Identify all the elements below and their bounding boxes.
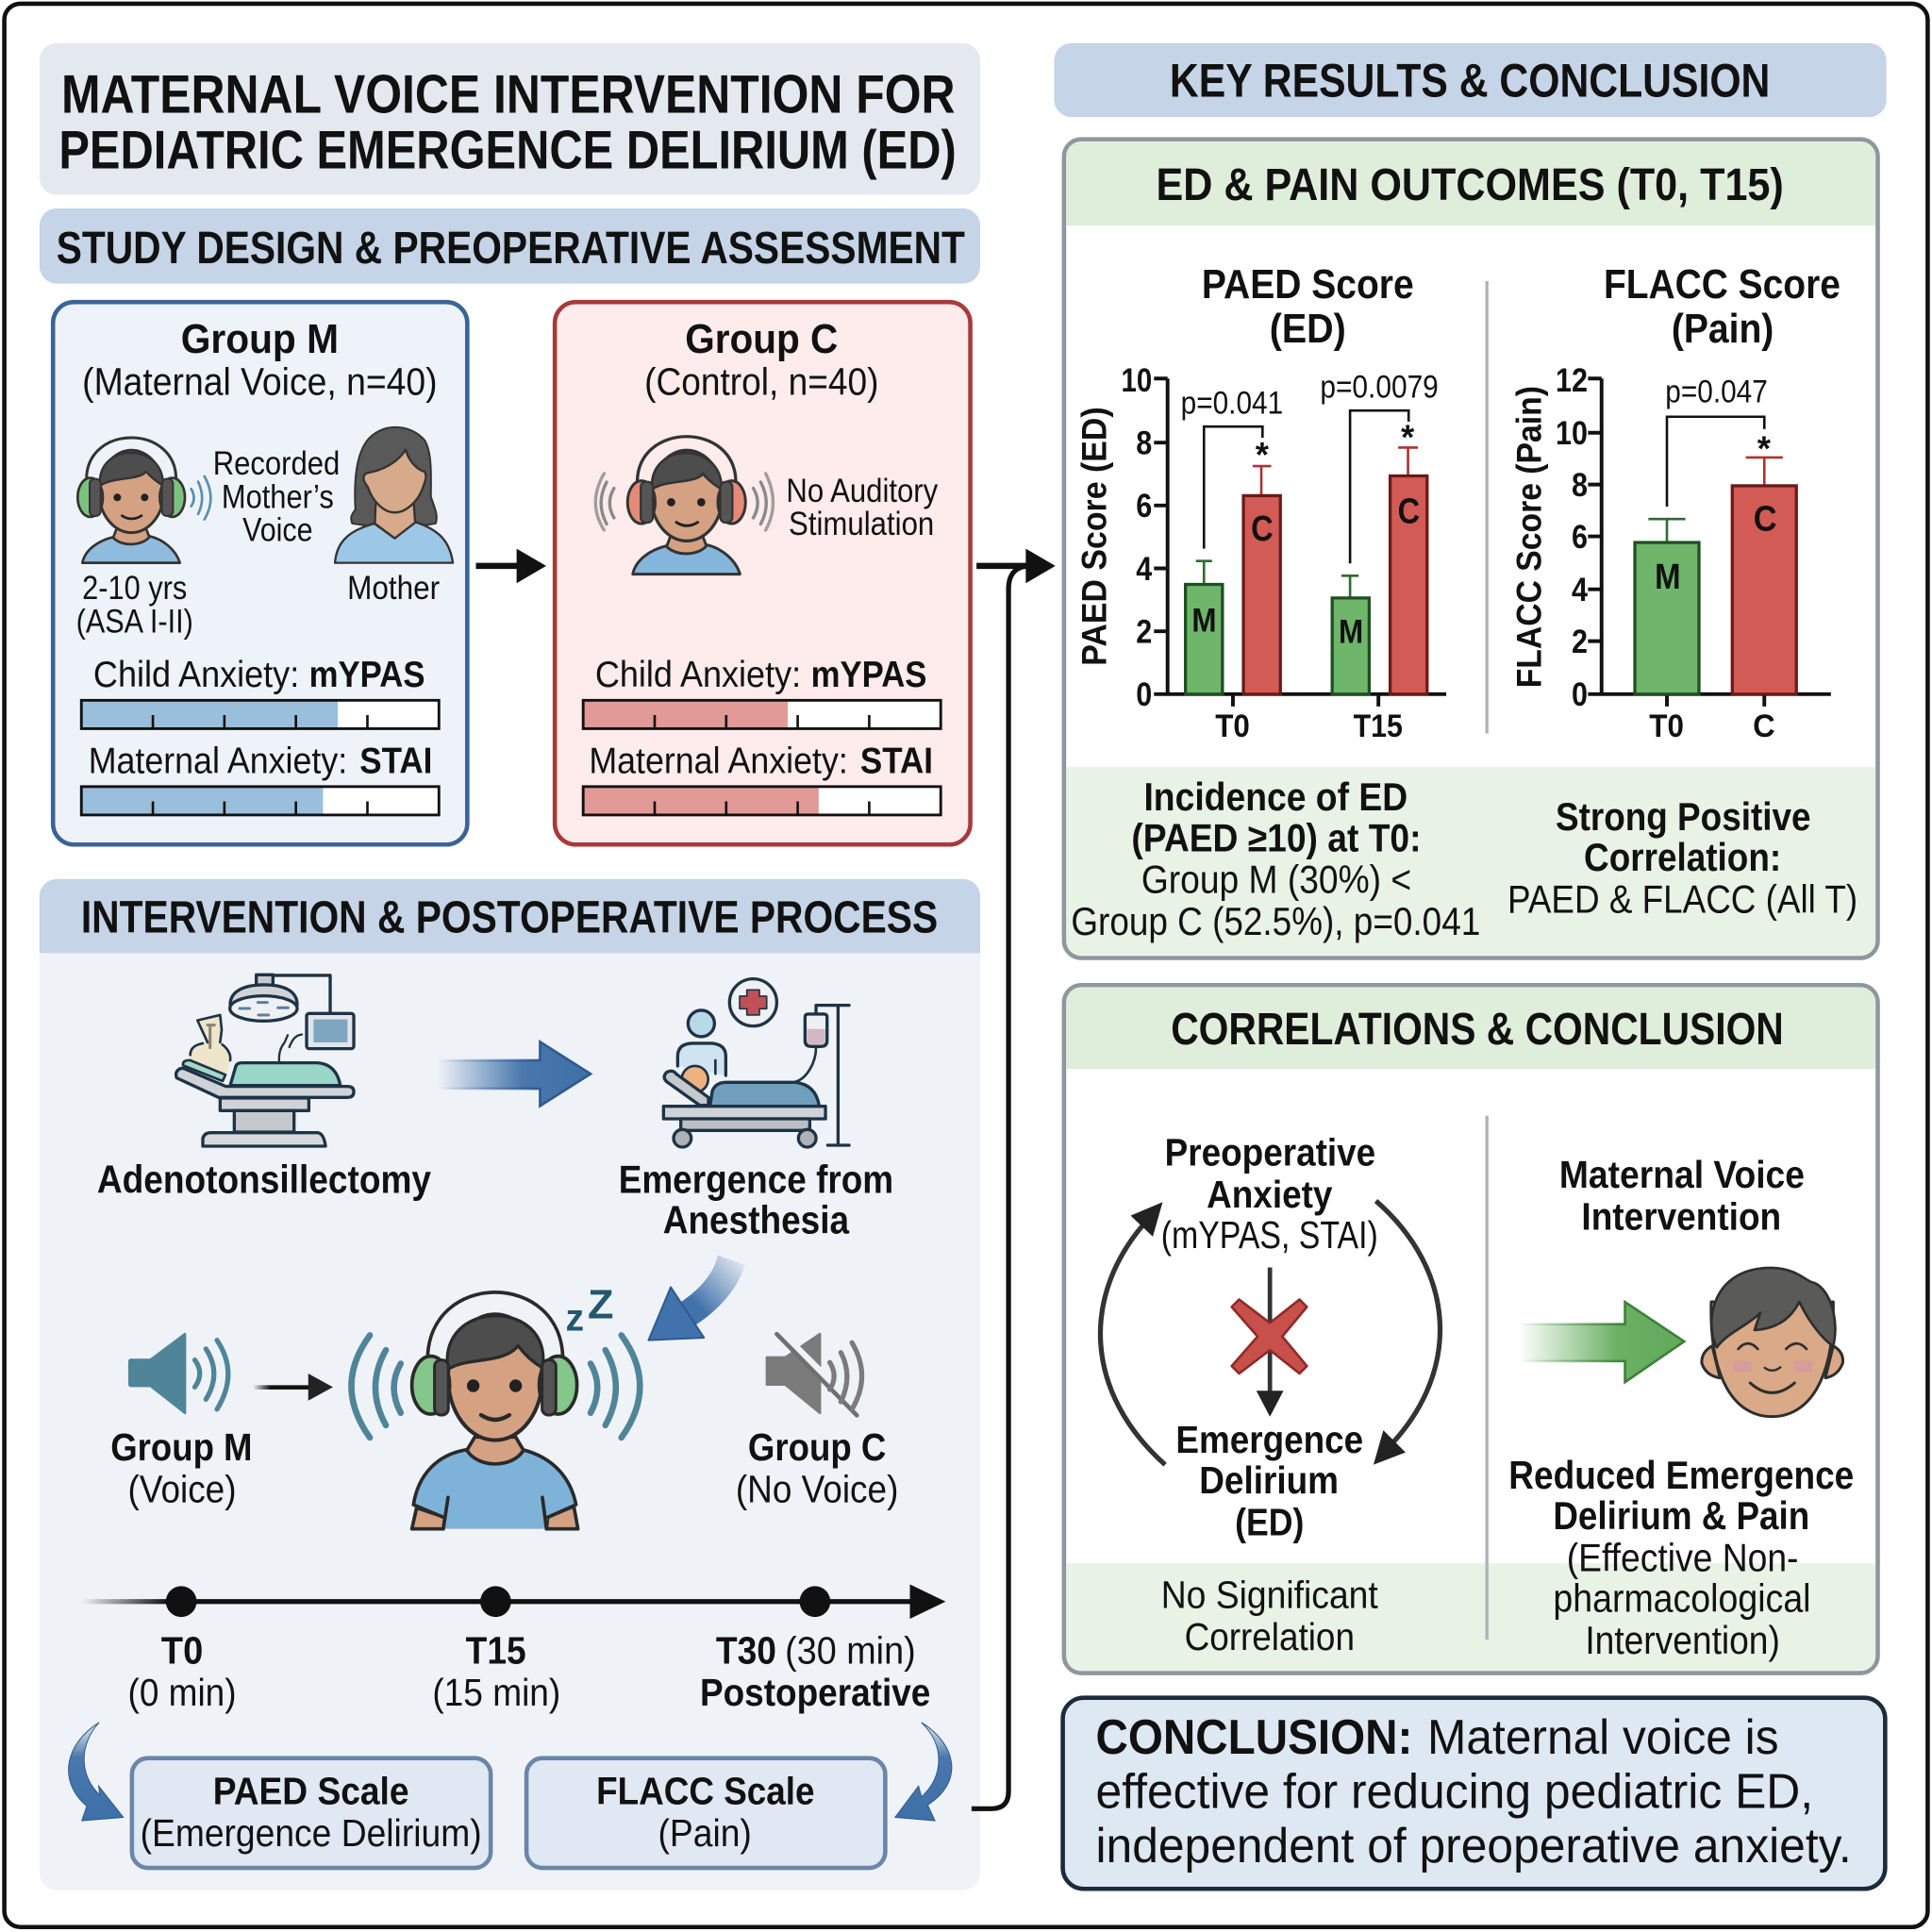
labels: age and mother bbox=[76, 570, 440, 640]
label: recorded voice: Recorded bbox=[213, 445, 340, 482]
arrow: curved to PAED scale bbox=[69, 1723, 124, 1821]
label: T30: Postoperative bbox=[700, 1671, 930, 1714]
heading: PAED chart bbox=[1202, 262, 1414, 352]
label: preoperative anxiety: Anxiety bbox=[1207, 1173, 1333, 1216]
icon: right sound waves bbox=[591, 1335, 640, 1438]
bar letters bbox=[1191, 492, 1420, 650]
tick labels: 0 bbox=[1136, 676, 1152, 713]
icon: sleep z: z bbox=[566, 1296, 584, 1340]
section header: intervention bbox=[40, 879, 980, 953]
x labels: C bbox=[1753, 708, 1775, 744]
arrow: right cycle bbox=[1374, 1201, 1441, 1465]
label: T0: T0 bbox=[161, 1629, 203, 1673]
label: T0: (0 min) bbox=[128, 1671, 237, 1714]
label: recorded voice: Mother’s bbox=[222, 478, 334, 515]
heading: group M bbox=[82, 317, 438, 403]
icon: recovery bed bbox=[663, 979, 849, 1147]
x labels bbox=[1649, 708, 1775, 744]
label: maternal anxiety: Maternal Anxiety: bbox=[89, 741, 347, 781]
panel heading: outcomes bbox=[1067, 142, 1875, 225]
icon: mother bbox=[335, 427, 453, 563]
panel heading: outcomes: ED & PAIN OUTCOMES (T0, T15) bbox=[1157, 159, 1784, 210]
box: FLACC scale bbox=[526, 1758, 885, 1868]
section header: intervention: INTERVENTION & POSTOPERATIVE PROCESS bbox=[81, 892, 938, 943]
label: preoperative anxiety: (mYPAS, STAI) bbox=[1161, 1213, 1378, 1257]
panel: correlations and conclusion bbox=[1064, 985, 1877, 1674]
bars bbox=[1635, 458, 1796, 694]
heading: PAED chart: (ED) bbox=[1270, 307, 1346, 352]
label: no significant correlation: Correlation bbox=[1185, 1615, 1355, 1658]
box: PAED scale bbox=[132, 1758, 491, 1868]
axes bbox=[1588, 378, 1831, 707]
bar chart: PAED score bbox=[1074, 362, 1446, 744]
label: emergence from anesthesia: Anesthesia bbox=[663, 1197, 850, 1241]
tick labels: 10 bbox=[1122, 362, 1152, 399]
bar letters: M bbox=[1655, 558, 1681, 597]
label: emergence delirium bbox=[1175, 1418, 1363, 1543]
p value bbox=[1665, 375, 1772, 468]
icon: happy child face bbox=[1702, 1268, 1843, 1417]
bar: child anxiety bbox=[81, 700, 439, 728]
label: preoperative anxiety bbox=[1161, 1131, 1378, 1257]
bar letters: C bbox=[1398, 492, 1420, 532]
icon: left sound waves bbox=[351, 1335, 401, 1438]
axes bbox=[1154, 378, 1446, 707]
tick labels: 4 bbox=[1136, 551, 1153, 588]
box: PAED scale: (Emergence Delirium) bbox=[141, 1811, 482, 1855]
band: outcome summary background bbox=[1067, 767, 1875, 956]
axis label: PAED: PAED Score (ED) bbox=[1074, 407, 1113, 666]
conclusion box: CONCLUSION: bbox=[1095, 1710, 1412, 1765]
label: child anxiety: Child Anxiety: bbox=[595, 655, 801, 695]
panel: intervention and postoperative process bbox=[40, 879, 980, 1890]
tick labels bbox=[1122, 362, 1153, 713]
label: maternal voice intervention bbox=[1559, 1153, 1805, 1239]
panel heading: correlations bbox=[1067, 988, 1875, 1069]
label: emergence delirium: Emergence bbox=[1175, 1418, 1363, 1461]
labels: age and mother: 2-10 yrs bbox=[82, 570, 187, 607]
illustration: child figure bbox=[412, 1292, 578, 1529]
text: positive correlation bbox=[1507, 794, 1857, 922]
label: T30: T30 bbox=[716, 1629, 776, 1673]
conclusion box: independent of preoperative anxiety. bbox=[1095, 1819, 1852, 1874]
tick labels: 0 bbox=[1572, 676, 1588, 713]
heading: FLACC chart bbox=[1604, 262, 1840, 352]
tick labels: 8 bbox=[1572, 467, 1588, 504]
p values: p=0.041 bbox=[1181, 385, 1283, 421]
band: correlation footer background bbox=[1067, 1563, 1875, 1671]
x labels: T0 bbox=[1649, 708, 1684, 744]
text: reduced emergence delirium: pharmacological bbox=[1553, 1576, 1811, 1621]
icon: sleep z bbox=[566, 1283, 613, 1340]
icon: voice speaker bbox=[129, 1334, 228, 1413]
label: no auditory stimulation: No Auditory bbox=[786, 473, 939, 509]
label: emergence delirium: (ED) bbox=[1235, 1500, 1304, 1543]
label: maternal anxiety: Maternal Anxiety: bbox=[589, 741, 848, 781]
p value: * bbox=[1757, 429, 1772, 468]
label: T15: T15 bbox=[466, 1629, 526, 1673]
arrow: no correlation bbox=[1257, 1268, 1284, 1417]
x labels: T15 bbox=[1354, 708, 1403, 744]
text: incidence of ED: Group M (30%) < bbox=[1141, 858, 1411, 902]
x labels bbox=[1215, 708, 1403, 744]
tick labels: 2 bbox=[1572, 624, 1588, 660]
bar: maternal anxiety bbox=[583, 787, 941, 815]
label: T30 bbox=[700, 1629, 930, 1714]
label: recorded voice: Voice bbox=[242, 512, 313, 549]
panel: ED and pain outcomes bbox=[1064, 140, 1877, 958]
heading: group C: Group C bbox=[685, 317, 838, 362]
p values: p=0.0079 bbox=[1320, 369, 1439, 405]
axis label: FLACC: FLACC Score (Pain) bbox=[1510, 386, 1549, 688]
label: preoperative anxiety: Preoperative bbox=[1165, 1131, 1375, 1174]
label: group M voice bbox=[110, 1425, 253, 1510]
label: T15 bbox=[432, 1629, 560, 1714]
tick labels: 4 bbox=[1572, 572, 1588, 608]
heading: group C: (Control, n=40) bbox=[644, 359, 878, 403]
label: maternal voice intervention: Maternal Voice bbox=[1559, 1153, 1805, 1196]
label: no significant correlation: No Significant bbox=[1161, 1574, 1378, 1617]
icon: muted speaker bbox=[767, 1334, 863, 1415]
label: child anxiety: mYPAS bbox=[309, 655, 425, 695]
timeline bbox=[81, 1584, 945, 1619]
conclusion box: Maternal voice is bbox=[1427, 1710, 1779, 1765]
label: group M voice: (Voice) bbox=[128, 1467, 237, 1510]
tick labels: 6 bbox=[1136, 488, 1152, 525]
icon: sound waves bbox=[192, 476, 210, 520]
tick labels: 8 bbox=[1136, 425, 1152, 461]
label: T30: (30 min) bbox=[785, 1629, 916, 1673]
section header: study design: STUDY DESIGN & PREOPERATIVE ASSESSMENT bbox=[57, 223, 965, 274]
text: reduced emergence delirium: (Effective Non- bbox=[1567, 1536, 1798, 1580]
x labels: T0 bbox=[1215, 708, 1250, 744]
conclusion box bbox=[1063, 1698, 1885, 1889]
label: emergence from anesthesia bbox=[619, 1157, 893, 1241]
label: group C no voice: Group C bbox=[748, 1425, 886, 1469]
heading: group M: Group M bbox=[181, 317, 339, 362]
bar letters bbox=[1655, 500, 1777, 597]
text: incidence of ED bbox=[1071, 774, 1480, 943]
heading: group M: (Maternal Voice, n=40) bbox=[82, 359, 438, 403]
significance brackets bbox=[1204, 410, 1408, 563]
text: incidence of ED: Group C (52.5%), p=0.041 bbox=[1071, 899, 1480, 943]
text: reduced emergence delirium bbox=[1508, 1453, 1854, 1662]
connector arrow: to results bbox=[972, 549, 1056, 1808]
significance bracket bbox=[1667, 417, 1764, 507]
tick labels: 2 bbox=[1136, 613, 1152, 650]
box: PAED scale: PAED Scale bbox=[213, 1769, 409, 1812]
tick labels: 6 bbox=[1572, 519, 1588, 556]
title: PEDIATRIC EMERGENCE DELIRIUM (ED) bbox=[58, 120, 957, 180]
text: reduced emergence delirium: Delirium & Pain bbox=[1553, 1493, 1809, 1538]
box: FLACC scale: (Pain) bbox=[658, 1811, 752, 1855]
label: group M voice: Group M bbox=[110, 1425, 253, 1469]
labels: age and mother: Mother bbox=[347, 570, 440, 607]
arrow: green effect bbox=[1519, 1302, 1684, 1382]
icon: grey waves bbox=[595, 474, 773, 530]
text: positive correlation: Correlation: bbox=[1584, 835, 1781, 879]
heading: PAED chart: PAED Score bbox=[1202, 262, 1414, 308]
text: reduced emergence delirium: Reduced Emergence bbox=[1508, 1453, 1854, 1497]
arrow: group M to group C bbox=[475, 549, 546, 583]
icon: sleep z: Z bbox=[588, 1283, 613, 1328]
box: FLACC scale: FLACC Scale bbox=[596, 1769, 815, 1812]
icon: operating table bbox=[176, 974, 354, 1146]
bar letters: C bbox=[1754, 500, 1777, 540]
label: recorded voice bbox=[213, 445, 340, 549]
heading: group C bbox=[644, 317, 878, 403]
label: group C no voice: (No Voice) bbox=[736, 1467, 898, 1510]
label: child anxiety: mYPAS bbox=[811, 655, 926, 695]
title panel bbox=[40, 43, 980, 194]
p value: p=0.047 bbox=[1665, 375, 1768, 410]
text: positive correlation: PAED & FLACC (All T) bbox=[1507, 877, 1857, 922]
text: positive correlation: Strong Positive bbox=[1556, 794, 1811, 839]
icon: child listening with headphones bbox=[351, 1292, 640, 1529]
bar letters: C bbox=[1251, 509, 1274, 549]
bar: child anxiety bbox=[583, 700, 941, 728]
icon: child with headphones bbox=[77, 438, 185, 563]
panel: group C bbox=[555, 302, 971, 844]
tick labels: 10 bbox=[1556, 415, 1588, 452]
section header: key results: KEY RESULTS & CONCLUSION bbox=[1170, 54, 1770, 107]
bar letters: M bbox=[1339, 613, 1363, 650]
arrow: emergence to child bbox=[648, 1255, 744, 1341]
arrow: surgery to emergence bbox=[438, 1041, 591, 1106]
labels: age and mother: (ASA I-II) bbox=[76, 603, 193, 640]
label: T0 bbox=[128, 1629, 237, 1714]
section header: study design bbox=[40, 208, 980, 284]
icon: red cross bbox=[1232, 1300, 1307, 1374]
text: incidence of ED: (PAED ≥10) at T0: bbox=[1131, 815, 1422, 859]
label: T15: (15 min) bbox=[432, 1671, 560, 1714]
bar: maternal anxiety bbox=[81, 787, 439, 815]
p values bbox=[1181, 369, 1439, 475]
label: emergence delirium: Delirium bbox=[1199, 1458, 1339, 1502]
bar letters: M bbox=[1191, 603, 1217, 640]
arrow: left cycle bbox=[1100, 1202, 1165, 1465]
tick labels: 12 bbox=[1556, 362, 1588, 399]
label: child anxiety bbox=[93, 655, 425, 695]
label: no significant correlation bbox=[1161, 1574, 1378, 1658]
bars bbox=[1186, 447, 1427, 694]
section header: key results bbox=[1054, 43, 1887, 117]
p values: * bbox=[1401, 418, 1415, 457]
label: group C no voice bbox=[736, 1425, 898, 1510]
label: child anxiety bbox=[595, 655, 926, 695]
label: maternal anxiety: STAI bbox=[860, 741, 933, 781]
bar chart: FLACC score bbox=[1510, 362, 1831, 744]
panel heading: correlations: CORRELATIONS & CONCLUSION bbox=[1171, 1004, 1784, 1055]
text: reduced emergence delirium: Intervention) bbox=[1585, 1618, 1780, 1662]
label: child anxiety: Child Anxiety: bbox=[93, 655, 299, 695]
p values: * bbox=[1256, 436, 1270, 475]
label: no auditory stimulation bbox=[786, 473, 939, 542]
label: maternal anxiety: STAI bbox=[359, 741, 432, 781]
arrow: curved to FLACC scale bbox=[895, 1723, 952, 1821]
label: emergence from anesthesia: Emergence from bbox=[619, 1157, 893, 1201]
panel: group M bbox=[53, 302, 467, 844]
arrow: voice to child bbox=[253, 1374, 333, 1401]
title: MATERNAL VOICE INTERVENTION FOR bbox=[61, 64, 955, 125]
heading: FLACC chart: (Pain) bbox=[1672, 307, 1774, 352]
title bbox=[58, 64, 957, 180]
label: maternal voice intervention: Intervention bbox=[1581, 1195, 1781, 1239]
icon: child with silent headphones bbox=[627, 437, 745, 575]
label: adenotonsillectomy: Adenotonsillectomy bbox=[97, 1157, 432, 1201]
label: no auditory stimulation: Stimulation bbox=[789, 506, 934, 542]
tick labels bbox=[1556, 362, 1588, 713]
conclusion box: effective for reducing pediatric ED, bbox=[1095, 1765, 1813, 1820]
heading: FLACC chart: FLACC Score bbox=[1604, 262, 1840, 308]
text: incidence of ED: Incidence of ED bbox=[1143, 774, 1407, 819]
